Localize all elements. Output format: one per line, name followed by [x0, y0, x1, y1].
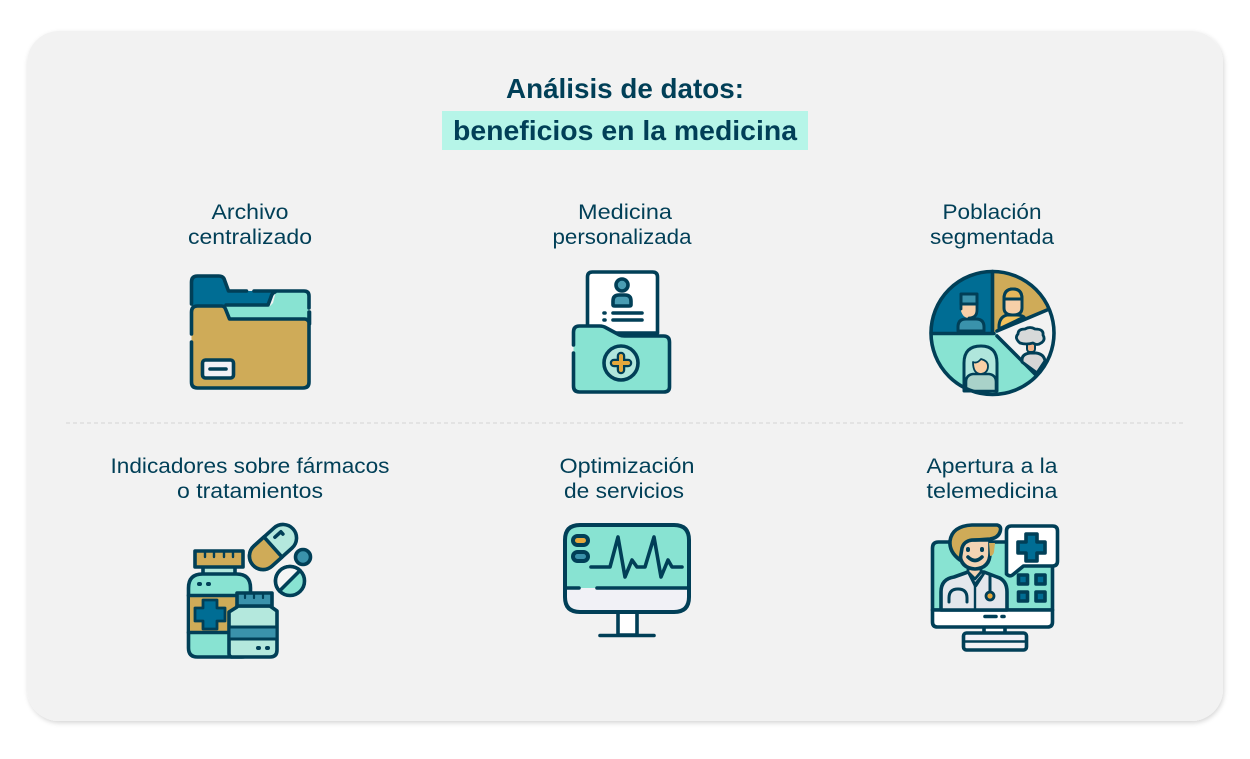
title: Análisis de datos: — [506, 73, 744, 104]
person 1 — [958, 319, 984, 331]
label: Apertura a la telemedicina: Apertura a la — [926, 455, 1058, 478]
small bottle — [229, 606, 277, 657]
label: Optimización de servicios — [560, 455, 694, 503]
doctor body — [941, 572, 1007, 610]
icon: telemedicine doctor — [932, 525, 1058, 650]
icon: folder — [192, 276, 310, 388]
head — [968, 562, 981, 579]
label: Apertura a la telemedicina: telemedicina — [926, 480, 1058, 503]
label: Población segmentada: Población — [942, 201, 1042, 224]
label: Optimización de servicios: Optimización — [560, 455, 694, 478]
icon: health monitor — [565, 525, 689, 636]
screen — [932, 542, 1052, 610]
dot — [296, 550, 310, 564]
label: Medicina personalizada: personalizada — [552, 226, 692, 249]
icon: patient record folder — [574, 272, 670, 392]
icon: population pie chart — [931, 272, 1054, 395]
label: Archivo centralizado: centralizado — [188, 226, 312, 249]
person 4 — [964, 346, 997, 391]
subtitle highlight: beneficios en la medicina — [453, 115, 797, 146]
person 3 — [1022, 353, 1045, 373]
indicators — [573, 536, 588, 545]
medical seal — [604, 346, 638, 380]
label: Indicadores sobre fármacos o tratamientos: o tratamientos — [177, 480, 323, 503]
label: Indicadores sobre fármacos o tratamientos: Indicadores sobre fármacos — [110, 455, 390, 478]
icon: pills and bottles — [188, 519, 310, 657]
label: Medicina personalizada: Medicina — [578, 201, 672, 224]
capsule — [244, 519, 302, 575]
label: Apertura a la telemedicina — [926, 455, 1058, 503]
label: Medicina personalizada — [552, 201, 692, 249]
title — [442, 73, 808, 150]
stand — [984, 625, 1005, 634]
label: Población segmentada — [930, 201, 1054, 249]
ECG trace — [591, 537, 682, 577]
label: Archivo centralizado — [188, 201, 312, 249]
large bottle — [203, 566, 235, 575]
speech bubble — [1006, 526, 1058, 576]
label: Indicadores sobre fármacos o tratamientos — [110, 455, 390, 503]
label: Archivo centralizado: Archivo — [212, 201, 288, 224]
app grid — [1018, 575, 1045, 601]
label tag — [202, 360, 234, 378]
tablet — [276, 566, 304, 596]
label: Población segmentada: segmentada — [930, 226, 1054, 249]
label: Optimización de servicios: de servicios — [564, 480, 684, 503]
person 2 — [999, 315, 1024, 329]
